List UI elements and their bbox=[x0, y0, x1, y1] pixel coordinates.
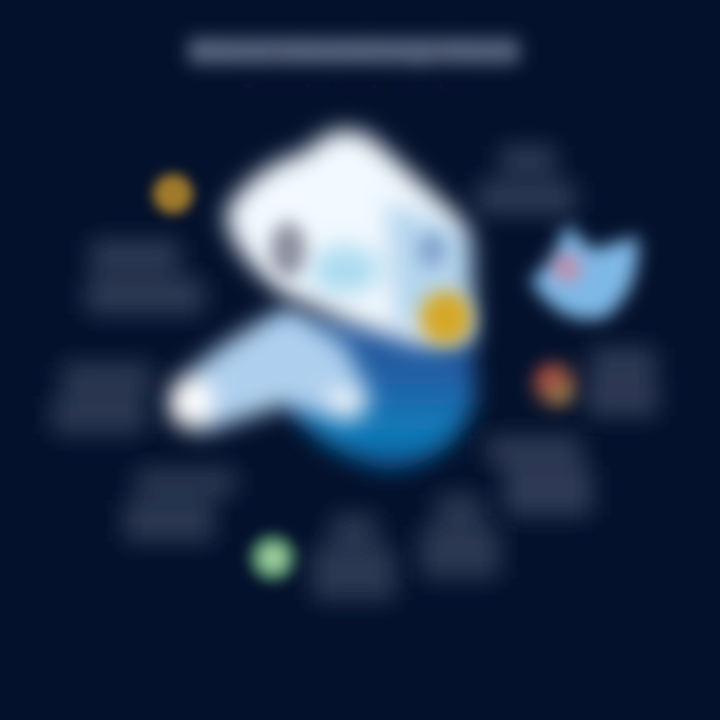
icon: light blue crown bbox=[530, 222, 638, 320]
face detail right bbox=[419, 233, 445, 267]
text block: middle left: Label bbox=[79, 369, 131, 391]
text block: lower left: Label bbox=[154, 473, 206, 495]
text block: lower right bbox=[486, 436, 592, 516]
text block: bottom right: Label bbox=[434, 499, 486, 521]
face detail left bbox=[270, 222, 306, 278]
text block: lower right: Label bbox=[514, 441, 566, 463]
text block: top right bbox=[476, 146, 576, 214]
white cloud top bbox=[226, 130, 474, 345]
text block: bottom center: Label bbox=[328, 521, 380, 543]
central illustration bbox=[168, 130, 476, 470]
light arm bbox=[168, 308, 372, 432]
lower blue body bbox=[265, 300, 476, 470]
text block: upper left bbox=[86, 240, 204, 314]
text block: bottom right bbox=[420, 494, 500, 578]
title: Main Heading Text bbox=[190, 35, 516, 66]
text block: right: Label bbox=[596, 355, 648, 377]
icon: red and green marker bbox=[534, 363, 578, 407]
subtitle: Subtitle line of text bbox=[240, 78, 470, 93]
text block: lower left bbox=[124, 468, 236, 542]
text block: middle left bbox=[52, 362, 152, 434]
icon: green circle bbox=[249, 534, 297, 582]
icon: yellow circle bbox=[153, 174, 193, 214]
text block: right bbox=[586, 348, 658, 416]
text block: bottom center bbox=[312, 514, 396, 600]
text block: upper left: Label bbox=[108, 245, 160, 267]
text block: top right: Label bbox=[500, 153, 552, 175]
yellow badge bbox=[420, 291, 472, 345]
